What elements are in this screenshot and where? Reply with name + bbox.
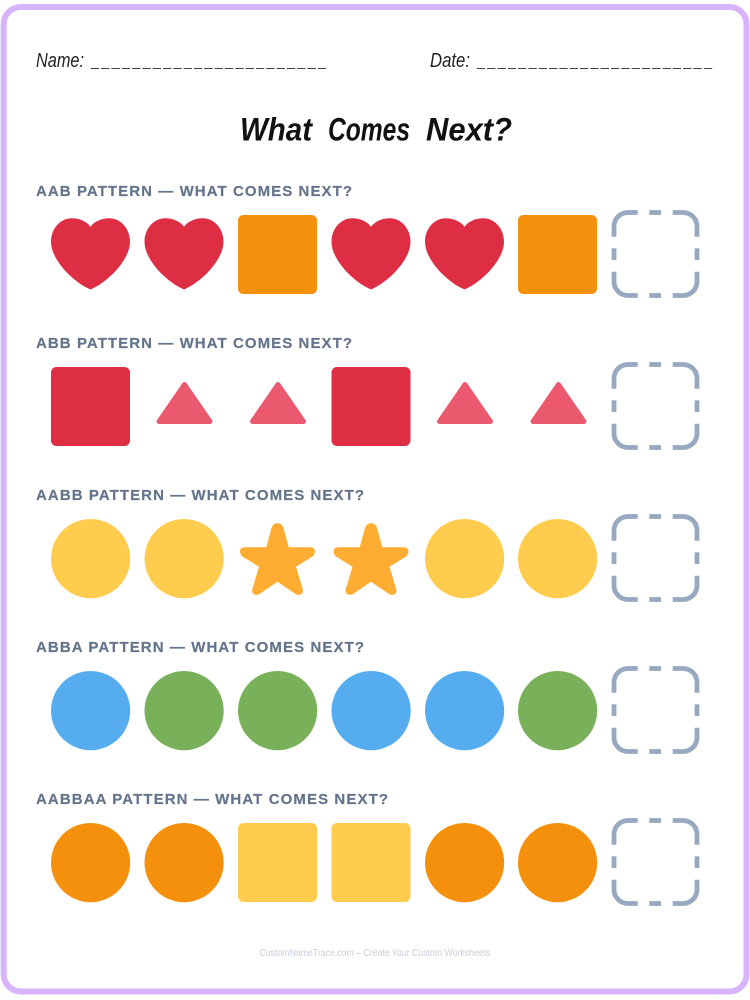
- heading: ABBA: ABBA PATTERN — WHAT COMES NEXT?: [36, 639, 364, 656]
- answer box: AAB: [614, 212, 697, 296]
- panel: AABBAA pattern: [36, 791, 697, 904]
- title: Next?: [426, 112, 512, 148]
- name field: Name:: [36, 50, 84, 72]
- answer box: AABBAA: [614, 820, 697, 904]
- shape sequence: ABB: [51, 367, 584, 446]
- name field: [36, 50, 327, 72]
- date field: [430, 50, 713, 72]
- panel: ABBA pattern: [36, 639, 697, 752]
- panel: AAB pattern: [36, 183, 697, 296]
- shape sequence: AAB: [51, 215, 597, 294]
- name field: _______________________: [90, 54, 327, 70]
- title: What: [240, 112, 313, 148]
- heading: AAB: AAB PATTERN — WHAT COMES NEXT?: [36, 183, 352, 200]
- footer: CustomNameTrace.com – Create Your Custom Worksheets: [260, 947, 490, 959]
- heading: AABBAA: AABBAA PATTERN — WHAT COMES NEXT?: [36, 791, 388, 808]
- shape sequence: AABB: [51, 519, 597, 598]
- shape sequence: AABBAA: [51, 823, 597, 902]
- title: Comes: [328, 112, 410, 148]
- date field: Date:: [430, 50, 470, 72]
- answer box: ABB: [614, 364, 697, 448]
- panel: ABB pattern: [36, 335, 697, 448]
- date field: _______________________: [476, 54, 713, 70]
- heading: AABB: AABB PATTERN — WHAT COMES NEXT?: [36, 487, 364, 504]
- answer box: AABB: [614, 516, 697, 600]
- shape sequence: ABBA: [51, 671, 597, 750]
- answer box: ABBA: [614, 668, 697, 752]
- panel: AABB pattern: [36, 487, 697, 600]
- heading: ABB: ABB PATTERN — WHAT COMES NEXT?: [36, 335, 352, 352]
